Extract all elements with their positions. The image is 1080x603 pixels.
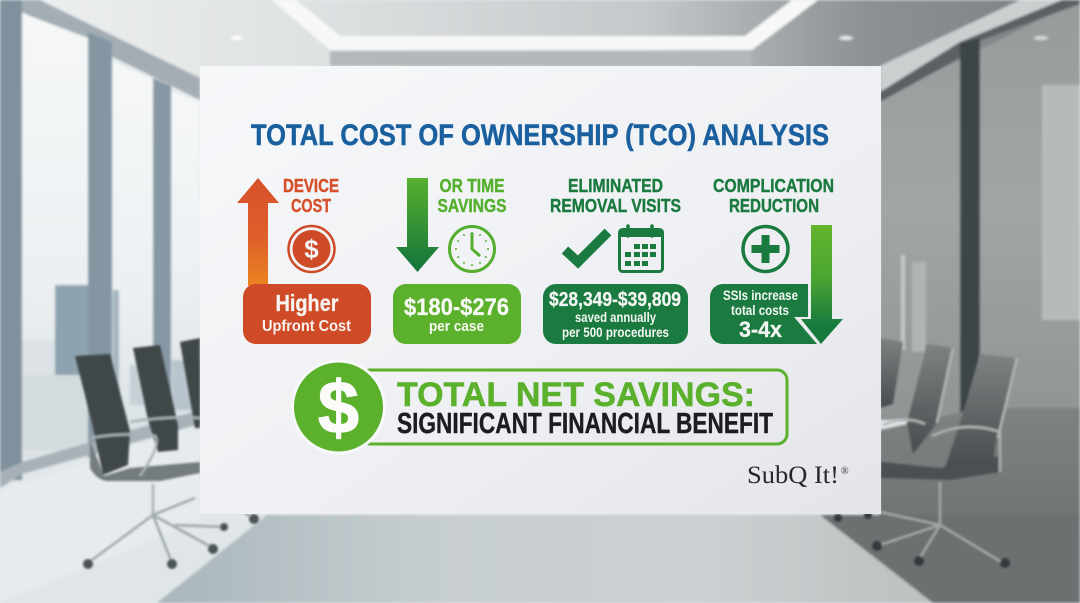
icon: large dollar circle: $ bbox=[318, 366, 359, 449]
callout: annual savings: saved annually bbox=[575, 309, 656, 325]
heading: device cost: DEVICE bbox=[283, 176, 339, 196]
callout: SSI cost multiplier bbox=[710, 284, 817, 344]
icon: dollar coin bbox=[288, 226, 334, 272]
callout: per case savings: per case bbox=[429, 318, 484, 335]
heading: device cost bbox=[283, 176, 339, 216]
chairs bbox=[75, 338, 1017, 569]
icon: clock bbox=[450, 226, 494, 272]
icon: check mark bbox=[565, 232, 608, 262]
callout: SSI cost multiplier: total costs bbox=[731, 302, 789, 318]
panel: white board bbox=[200, 66, 881, 514]
arrow: up bbox=[237, 178, 279, 286]
icon: medical cross bbox=[743, 226, 788, 272]
heading: or time savings: SAVINGS bbox=[438, 196, 506, 216]
heading: eliminated removal visits: ELIMINATED bbox=[568, 176, 663, 196]
heading: or time savings: OR TIME bbox=[440, 176, 504, 196]
column: eliminated removal visits bbox=[543, 176, 688, 344]
callout: higher upfront cost: Higher bbox=[276, 290, 339, 316]
callout: per case savings bbox=[393, 284, 521, 344]
column: OR time savings bbox=[393, 176, 521, 344]
title: TOTAL COST OF OWNERSHIP (TCO) ANALYSIS bbox=[251, 119, 829, 152]
column: device cost bbox=[237, 176, 371, 344]
callout: SSI cost multiplier: SSIs increase bbox=[723, 287, 798, 303]
heading: eliminated removal visits: REMOVAL VISITS bbox=[550, 196, 681, 216]
banner outline bbox=[360, 370, 787, 444]
callout: SSI cost multiplier: 3-4x bbox=[739, 317, 783, 342]
banner: total net savings bbox=[291, 360, 787, 454]
column: complication reduction bbox=[710, 176, 843, 344]
icon: calendar bbox=[619, 226, 663, 272]
callout: annual savings: $28,349-$39,809 bbox=[549, 289, 681, 311]
heading: complication reduction bbox=[713, 176, 834, 216]
callout: annual savings bbox=[543, 284, 688, 344]
arrow: down with outline bbox=[801, 225, 843, 344]
heading: or time savings bbox=[438, 176, 506, 216]
callout: higher upfront cost bbox=[243, 284, 371, 344]
arrow: down bbox=[396, 178, 439, 272]
heading: complication reduction: COMPLICATION bbox=[713, 176, 834, 196]
heading: complication reduction: REDUCTION bbox=[729, 196, 819, 216]
icon: large dollar circle bbox=[291, 360, 386, 454]
banner subheading: SIGNIFICANT FINANCIAL BENEFIT bbox=[397, 408, 773, 440]
logo: SubQ It!: ® bbox=[841, 466, 849, 477]
callout: annual savings: per 500 procedures bbox=[562, 324, 669, 340]
heading: device cost: COST bbox=[291, 196, 331, 216]
logo: SubQ It!: SubQ It! bbox=[747, 462, 839, 489]
icon: dollar coin: $ bbox=[304, 234, 319, 264]
callout: per case savings: $180-$276 bbox=[404, 294, 509, 321]
banner heading: TOTAL NET SAVINGS: bbox=[397, 376, 755, 414]
callout: higher upfront cost: Upfront Cost bbox=[262, 318, 352, 335]
heading: eliminated removal visits bbox=[550, 176, 681, 216]
